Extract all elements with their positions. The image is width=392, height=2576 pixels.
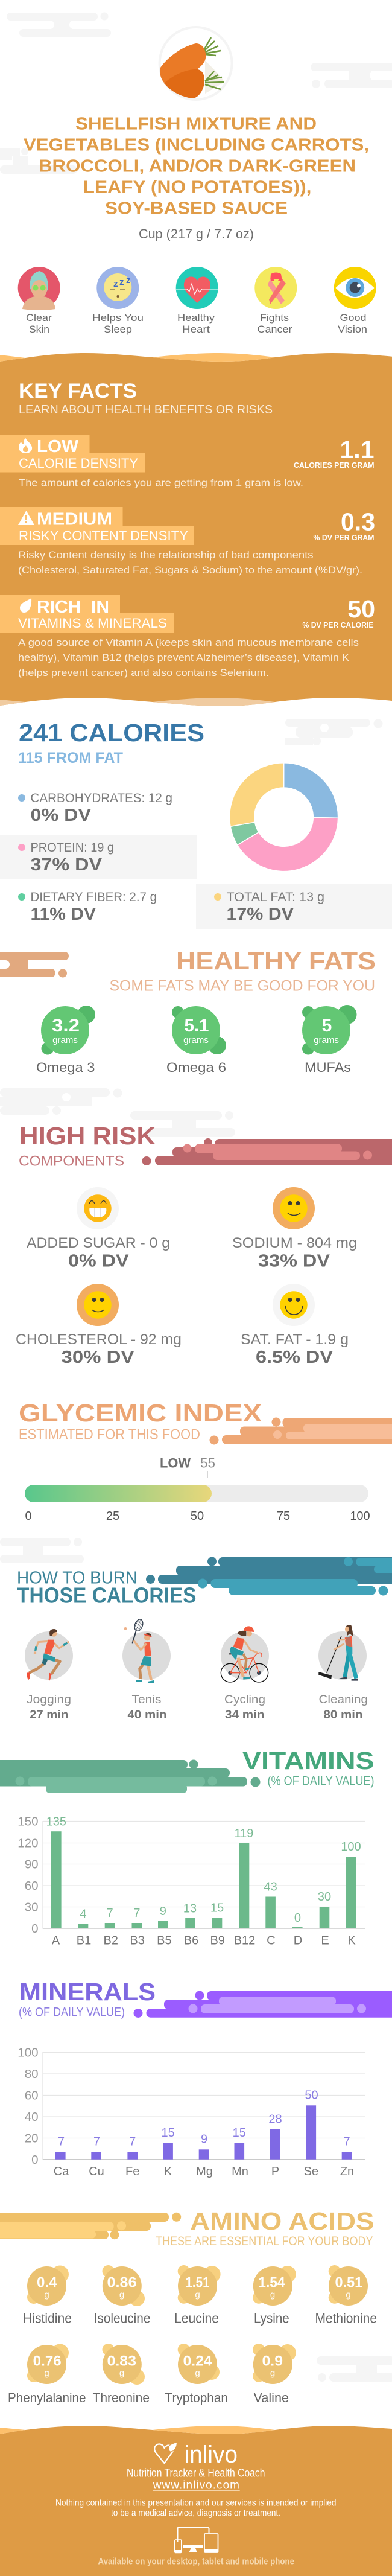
minerals categories: [54, 2165, 354, 2178]
minerals categories: Ca: [54, 2165, 69, 2178]
label: good vision: [338, 313, 367, 335]
vitamins y axis: 120: [17, 1836, 39, 1851]
vitamins categories: E: [321, 1934, 329, 1947]
minerals values: 50: [305, 2089, 318, 2102]
amino acids heading: [156, 2207, 374, 2248]
amino: valine: 0.9: [262, 2353, 283, 2370]
brush: healthy fats: [0, 952, 69, 978]
legend: carbohydrates: [18, 791, 172, 825]
amino: tryptophan: 0.24: [183, 2353, 212, 2370]
icon: fights cancer: [254, 267, 297, 309]
vitamins values: [46, 1816, 361, 1925]
risk: saturated fat: 6.5% DV: [256, 1348, 334, 1367]
minerals y axis: 20: [25, 2132, 39, 2145]
amino: leucine: [174, 2265, 221, 2326]
fat: mufas: 5: [322, 1016, 332, 1036]
footer availability note: Available on your desktop, tablet and mobile phone: [98, 2557, 294, 2566]
high risk heading: [19, 1122, 156, 1170]
activity: tennis: [122, 1618, 171, 1721]
footer tagline: Nutrition Tracker & Health Coach: [127, 2467, 265, 2479]
vitamins y axis: 60: [25, 1879, 39, 1893]
legend: total fat: TOTAL FAT: 13 g: [227, 890, 324, 904]
minerals y axis: 0: [31, 2153, 39, 2167]
vitamins y axis: 150: [17, 1814, 39, 1829]
minerals categories: Se: [304, 2165, 318, 2178]
amino: histidine: [23, 2266, 72, 2326]
minerals categories: K: [164, 2165, 172, 2178]
key facts heading: KEY FACTS: [19, 380, 137, 403]
brush: glycemic index: [210, 1417, 392, 1445]
vitamins values: 15: [210, 1901, 224, 1914]
activity: jogging: Jogging: [27, 1694, 71, 1706]
key facts heading: LEARN ABOUT HEALTH BENEFITS OR RISKS: [19, 403, 273, 416]
glycemic index heading: [19, 1399, 262, 1443]
icon: helps you sleep: [96, 267, 139, 309]
amino: valine: Valine: [253, 2390, 289, 2405]
vitamins values: 135: [46, 1816, 66, 1829]
burn calories heading: THOSE CALORIES: [17, 1583, 197, 1608]
legend: protein: 37% DV: [30, 855, 103, 875]
vitamins bars: [51, 1831, 356, 1928]
minerals values: 7: [343, 2135, 350, 2148]
vitamins categories: B2: [103, 1934, 118, 1947]
minerals heading: (% OF DAILY VALUE): [19, 2005, 125, 2020]
vitamins categories: B1: [77, 1934, 91, 1947]
activity: jogging: [25, 1629, 73, 1721]
panel: key facts: [0, 353, 392, 706]
minerals values: 9: [201, 2133, 207, 2146]
glycemic index gauge: 55: [200, 1456, 215, 1470]
calories heading: 241 CALORIES: [19, 719, 204, 747]
risk: added sugar: 0% DV: [68, 1252, 129, 1271]
minerals categories: Fe: [125, 2165, 139, 2178]
minerals values: [58, 2089, 350, 2148]
legend: total fat: 17% DV: [227, 905, 294, 924]
minerals values: 28: [268, 2113, 282, 2126]
glycemic index gauge: 0: [25, 1510, 32, 1523]
activity: tennis: Tenis: [131, 1694, 162, 1706]
legend: carbohydrates: CARBOHYDRATES: 12 g: [30, 791, 172, 805]
vitamins values: 43: [264, 1881, 277, 1894]
amino: phenylalanine: g: [44, 2368, 49, 2379]
glycemic index gauge: 100: [350, 1510, 370, 1523]
amino: isoleucine: Isoleucine: [94, 2310, 151, 2326]
fat: omega 6: 5.1: [185, 1016, 209, 1036]
healthy fats heading: HEALTHY FATS: [176, 947, 376, 975]
burn calories heading: HOW TO BURN: [17, 1568, 138, 1587]
risk: added sugar: ADDED SUGAR - 0 g: [27, 1235, 170, 1251]
vitamins values: 7: [133, 1907, 140, 1920]
vitamins categories: B12: [234, 1934, 255, 1947]
label: helps you sleep: [92, 313, 144, 335]
fact: rich in vitamins and minerals: A good source of Vitamin A (keeps skin and mucous membrane cells: [18, 637, 359, 648]
amino: isoleucine: g: [119, 2290, 124, 2300]
risk: cholesterol: CHOLESTEROL - 92 mg: [16, 1331, 182, 1348]
fact: medium risky content density: Risky Content density is the relationship of bad components: [18, 549, 314, 561]
activity: cleaning: Cleaning: [318, 1694, 368, 1706]
fact: rich in vitamins and minerals: % DV PER CALORIE: [303, 620, 374, 630]
risk: sodium: [232, 1187, 357, 1271]
label: clear skin: Skin: [29, 324, 49, 335]
label: good vision: Vision: [338, 324, 367, 335]
amino: histidine: Histidine: [23, 2310, 72, 2326]
vitamins categories: K: [347, 1934, 356, 1947]
vitamins y axis: 0: [31, 1922, 39, 1936]
amino: tryptophan: g: [195, 2368, 200, 2379]
fact: medium risky content density: (Cholesterol, Saturated Fat, Sugars & Sodium) to the amount (%DV/gr).: [18, 564, 362, 576]
brush: burn calories: [146, 1557, 392, 1596]
calories heading: 115 FROM FAT: [18, 750, 123, 767]
chart: calorie donut: [230, 763, 338, 872]
label: helps you sleep: Helps You: [92, 313, 144, 324]
icon: healthy heart: [176, 267, 218, 309]
vitamins heading: [242, 1747, 374, 1788]
high risk heading: HIGH RISK: [19, 1122, 156, 1150]
activity: cleaning: 80 min: [323, 1709, 363, 1721]
vitamins categories: [52, 1934, 356, 1947]
vitamins values: 100: [341, 1840, 361, 1854]
amino: leucine: 1.51: [186, 2274, 210, 2291]
label: healthy heart: Heart: [182, 324, 210, 335]
logo: inlivo: [154, 2441, 238, 2468]
risk: cholesterol: 30% DV: [62, 1348, 134, 1367]
vitamins categories: B5: [157, 1934, 172, 1947]
fact: rich in vitamins and minerals: VITAMINS & MINERALS: [18, 616, 167, 631]
amino: threonine: [93, 2344, 150, 2405]
fact: low calorie density: The amount of calories you are getting from 1 gram is low.: [19, 477, 303, 489]
risk: cholesterol: [16, 1284, 182, 1367]
label: clear skin: [26, 313, 52, 335]
amino: methionine: [315, 2265, 377, 2326]
amino: phenylalanine: 0.76: [33, 2353, 62, 2370]
icon: helps you sleep: z: [119, 277, 124, 287]
label: good vision: Good: [340, 313, 367, 324]
title: SOY-BASED SAUCE: [105, 199, 288, 218]
label: healthy heart: Healthy: [177, 313, 215, 324]
minerals values: 7: [58, 2135, 65, 2148]
legend: protein: [0, 835, 197, 879]
minerals categories: Zn: [340, 2165, 354, 2178]
amino: threonine: g: [119, 2368, 124, 2379]
fact: medium risky content density: 0.3: [341, 508, 375, 536]
icon: clear skin: [18, 267, 60, 310]
fact: rich in vitamins and minerals: 50: [347, 595, 375, 623]
fat: omega 3: 3.2: [52, 1016, 80, 1036]
amino: threonine: Threonine: [93, 2390, 150, 2405]
fact: low calorie density: [0, 435, 374, 489]
glycemic index heading: GLYCEMIC INDEX: [19, 1399, 262, 1427]
glycemic index gauge: 50: [191, 1510, 204, 1523]
fat: mufas: grams: [314, 1035, 339, 1045]
brush: minerals: [134, 1991, 392, 2018]
footer: [0, 2426, 392, 2576]
fact: rich in vitamins and minerals: RICH IN: [37, 598, 109, 617]
label: healthy heart: [177, 313, 215, 335]
minerals categories: P: [271, 2165, 279, 2178]
vitamins y axis: [17, 1814, 39, 1936]
amino acids heading: AMINO ACIDS: [190, 2207, 374, 2235]
logo: inlivo: inlivo: [185, 2441, 238, 2468]
fat: omega 3: [36, 1006, 95, 1075]
minerals categories: Mn: [232, 2165, 248, 2178]
activity: cleaning: [318, 1625, 368, 1721]
fact: medium risky content density: [0, 507, 375, 576]
amino: tryptophan: Tryptophan: [165, 2390, 228, 2405]
legend: dietary fiber: DIETARY FIBER: 2.7 g: [30, 890, 157, 904]
minerals y axis: [17, 2046, 39, 2167]
legend: dietary fiber: 11% DV: [30, 905, 96, 924]
fact: low calorie density: CALORIES PER GRAM: [294, 461, 374, 470]
minerals y axis: 80: [25, 2067, 39, 2081]
bar chart: vitamins: [17, 1814, 365, 1947]
title: VEGETABLES (INCLUDING CARROTS,: [24, 135, 369, 155]
icon: good vision: [334, 267, 376, 309]
footer disclaimer: [55, 2498, 337, 2519]
vitamins values: 7: [106, 1907, 113, 1920]
minerals categories: Mg: [196, 2165, 213, 2178]
amino: phenylalanine: [8, 2344, 86, 2405]
glycemic index gauge: 25: [106, 1510, 119, 1523]
title: SHELLFISH MIXTURE AND: [75, 115, 317, 134]
amino: lysine: g: [270, 2290, 275, 2300]
amino: histidine: 0.4: [37, 2274, 57, 2291]
icon: helps you sleep: z: [113, 279, 118, 289]
bar chart: minerals: [17, 2046, 365, 2178]
amino: methionine: g: [346, 2290, 351, 2300]
fact: rich in vitamins and minerals: [0, 595, 375, 678]
amino: valine: g: [270, 2368, 275, 2379]
glycemic index gauge: [25, 1456, 370, 1523]
fat: mufas: MUFAs: [305, 1060, 351, 1075]
vitamins values: 9: [160, 1905, 166, 1918]
minerals heading: MINERALS: [19, 1978, 156, 2006]
food image: carrots: [160, 27, 232, 100]
amino: histidine: g: [44, 2290, 49, 2300]
vitamins heading: VITAMINS: [242, 1747, 374, 1774]
amino: threonine: 0.83: [107, 2353, 136, 2370]
amino: isoleucine: [94, 2265, 151, 2326]
fat: omega 6: [166, 1006, 226, 1075]
vitamins categories: B6: [184, 1934, 198, 1947]
vitamins heading: (% OF DAILY VALUE): [268, 1774, 374, 1788]
vitamins categories: D: [294, 1934, 302, 1947]
high risk heading: COMPONENTS: [19, 1153, 124, 1170]
glycemic index gauge: 75: [277, 1510, 290, 1523]
activity: cycling: Cycling: [224, 1694, 265, 1706]
minerals values: 15: [161, 2126, 175, 2140]
minerals values: 15: [233, 2126, 246, 2140]
amino: methionine: 0.51: [335, 2274, 362, 2291]
icon: helps you sleep: z: [126, 275, 130, 285]
legend: dietary fiber: [18, 890, 157, 924]
vitamins values: 119: [235, 1827, 253, 1840]
legend: protein: PROTEIN: 19 g: [30, 841, 114, 855]
amino: lysine: 1.54: [258, 2274, 285, 2291]
fact: medium risky content density: % DV PER GRAM: [314, 533, 374, 542]
risk: saturated fat: SAT. FAT - 1.9 g: [241, 1331, 349, 1348]
minerals y axis: 60: [25, 2088, 39, 2103]
brush: amino acids: [0, 2213, 181, 2239]
fact: medium risky content density: RISKY CONTENT DENSITY: [19, 528, 188, 543]
fat: omega 6: grams: [183, 1035, 209, 1045]
fat: omega 3: grams: [52, 1035, 78, 1045]
amino: lysine: [253, 2266, 296, 2326]
footer website: www.inlivo.com: [153, 2479, 239, 2492]
amino: methionine: Methionine: [315, 2310, 377, 2326]
minerals categories: Cu: [89, 2165, 104, 2178]
footer disclaimer: Nothing contained in this presentation and our services is intended or implied: [55, 2498, 337, 2508]
legend: carbohydrates: 0% DV: [30, 806, 92, 825]
activity: tennis: 40 min: [128, 1709, 166, 1721]
vitamins y axis: 30: [25, 1900, 39, 1914]
brush: vitamins: [0, 1760, 261, 1793]
label: clear skin: Clear: [26, 313, 52, 324]
risk: sodium: 33% DV: [258, 1252, 330, 1271]
amino: valine: [253, 2344, 296, 2405]
activity: cycling: [221, 1626, 269, 1721]
minerals values: 7: [129, 2135, 136, 2148]
vitamins values: 13: [183, 1902, 197, 1916]
minerals values: 7: [93, 2135, 100, 2148]
minerals bars: [55, 2105, 352, 2160]
calories heading: [18, 719, 204, 767]
vitamins categories: B9: [210, 1934, 225, 1947]
vitamins categories: A: [52, 1934, 60, 1947]
vitamins y axis: 90: [25, 1858, 39, 1871]
brush: high risk: [142, 1138, 392, 1165]
vitamins values: 30: [318, 1890, 331, 1904]
fact: medium risky content density: MEDIUM: [37, 509, 112, 529]
vitamins values: 0: [294, 1911, 301, 1925]
vitamins categories: C: [267, 1934, 276, 1947]
risk: sodium: SODIUM - 804 mg: [232, 1235, 357, 1251]
burn calories heading: [17, 1568, 197, 1608]
serving size: Cup (217 g / 7.7 oz): [139, 226, 254, 241]
minerals y axis: 100: [17, 2046, 39, 2059]
healthy fats heading: [110, 947, 376, 995]
vitamins categories: B3: [130, 1934, 145, 1947]
footer disclaimer: to be a medical advice, diagnosis or treatment.: [111, 2508, 280, 2519]
amino: leucine: Leucine: [174, 2310, 219, 2326]
minerals heading: [19, 1978, 156, 2020]
fact: rich in vitamins and minerals: healthy), Vitamin B12 (helps prevent Alzheimer’s disease), Vitamin K: [18, 652, 350, 663]
amino: leucine: g: [195, 2290, 200, 2300]
activity: jogging: 27 min: [30, 1709, 69, 1721]
minerals y axis: 40: [25, 2110, 39, 2124]
fact: low calorie density: CALORIE DENSITY: [19, 456, 138, 471]
fat: mufas: [302, 1005, 357, 1075]
label: fights cancer: Cancer: [257, 324, 292, 335]
label: fights cancer: [257, 313, 292, 335]
title: [24, 115, 369, 218]
fact: rich in vitamins and minerals: (helps prevent cancer) and also contains Selenium.: [18, 667, 269, 678]
amino: phenylalanine: Phenylalanine: [8, 2390, 86, 2405]
risk: added sugar: [27, 1187, 170, 1271]
healthy fats heading: SOME FATS MAY BE GOOD FOR YOU: [110, 978, 375, 995]
amino: lysine: Lysine: [254, 2310, 289, 2326]
risk: saturated fat: [241, 1284, 349, 1367]
icon: devices: [175, 2527, 218, 2553]
fact: low calorie density: 1.1: [340, 436, 374, 464]
label: helps you sleep: Sleep: [104, 324, 132, 335]
legend: total fat: [196, 884, 392, 929]
amino: isoleucine: 0.86: [107, 2274, 136, 2291]
title: BROCCOLI, AND/OR DARK-GREEN: [39, 157, 356, 176]
glycemic index gauge: LOW: [160, 1456, 191, 1470]
key facts heading: [19, 380, 273, 416]
fat: omega 6: Omega 6: [166, 1060, 226, 1075]
amino: tryptophan: [165, 2344, 228, 2405]
activity: cycling: 34 min: [225, 1709, 264, 1721]
vitamins values: 4: [80, 1908, 87, 1921]
label: fights cancer: Fights: [260, 313, 289, 324]
fact: low calorie density: LOW: [37, 437, 79, 456]
fat: omega 3: Omega 3: [36, 1060, 95, 1075]
glycemic index heading: ESTIMATED FOR THIS FOOD: [19, 1427, 200, 1443]
title: LEAFY (NO POTATOES)),: [83, 177, 311, 197]
